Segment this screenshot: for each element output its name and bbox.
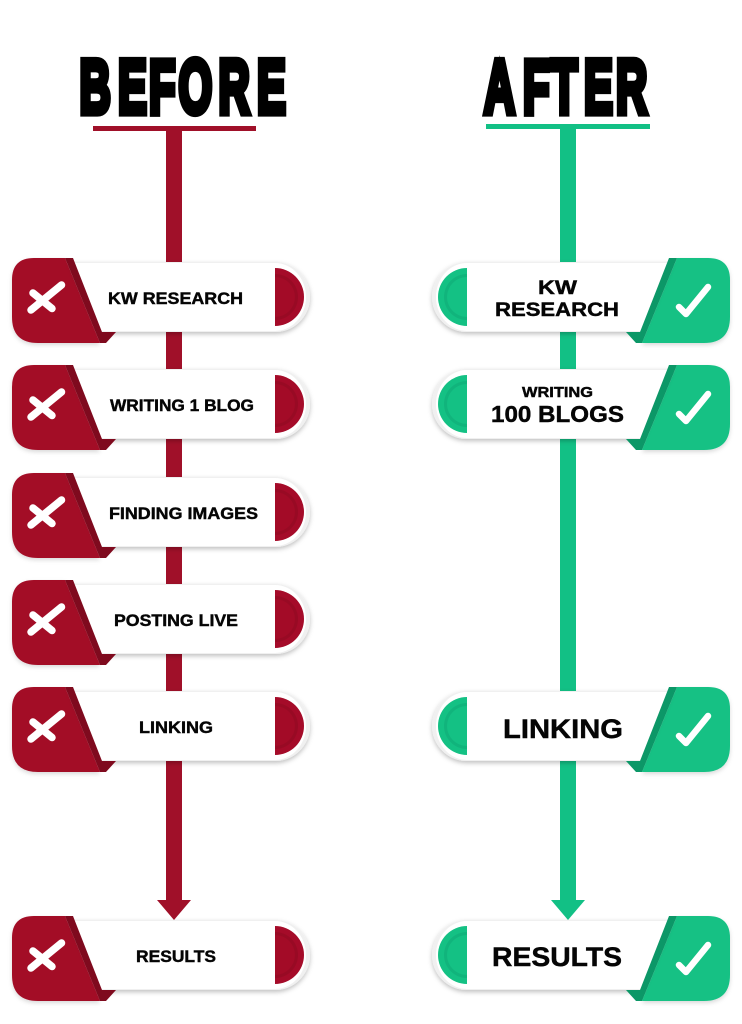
after row: LINKING [432,687,730,772]
after row: RESULTS [432,916,730,1001]
before row: WRITING 1 BLOG [12,365,310,450]
before row: RESULTS [12,916,310,1001]
after row: WRITING 100 BLOGS [432,365,730,450]
after row: KW RESEARCH: RESEARCH [495,300,619,321]
before row: LINKING [12,687,310,772]
before row: FINDING IMAGES [12,473,310,558]
heading: AFTER: AFTER [484,45,647,130]
before row: POSTING LIVE: POSTING LIVE [114,611,238,630]
after row: RESULTS: RESULTS [492,942,622,972]
before row: WRITING 1 BLOG: WRITING 1 BLOG [110,396,254,415]
after row: WRITING 100 BLOGS: 100 BLOGS [491,401,624,427]
heading: BEFORE: BEFORE [80,45,286,130]
before row: POSTING LIVE [12,580,310,665]
after row: KW RESEARCH: KW [538,278,577,299]
before row: FINDING IMAGES: FINDING IMAGES [109,504,258,523]
after row: KW RESEARCH [432,258,730,343]
before timeline arrow [93,126,256,920]
after row: LINKING: LINKING [503,714,623,744]
before row: KW RESEARCH [12,258,310,343]
before row: RESULTS: RESULTS [136,947,216,966]
after timeline arrow [486,124,650,920]
after row: WRITING 100 BLOGS: WRITING [522,384,593,401]
before row: LINKING: LINKING [139,718,213,737]
before row: KW RESEARCH: KW RESEARCH [108,289,243,308]
